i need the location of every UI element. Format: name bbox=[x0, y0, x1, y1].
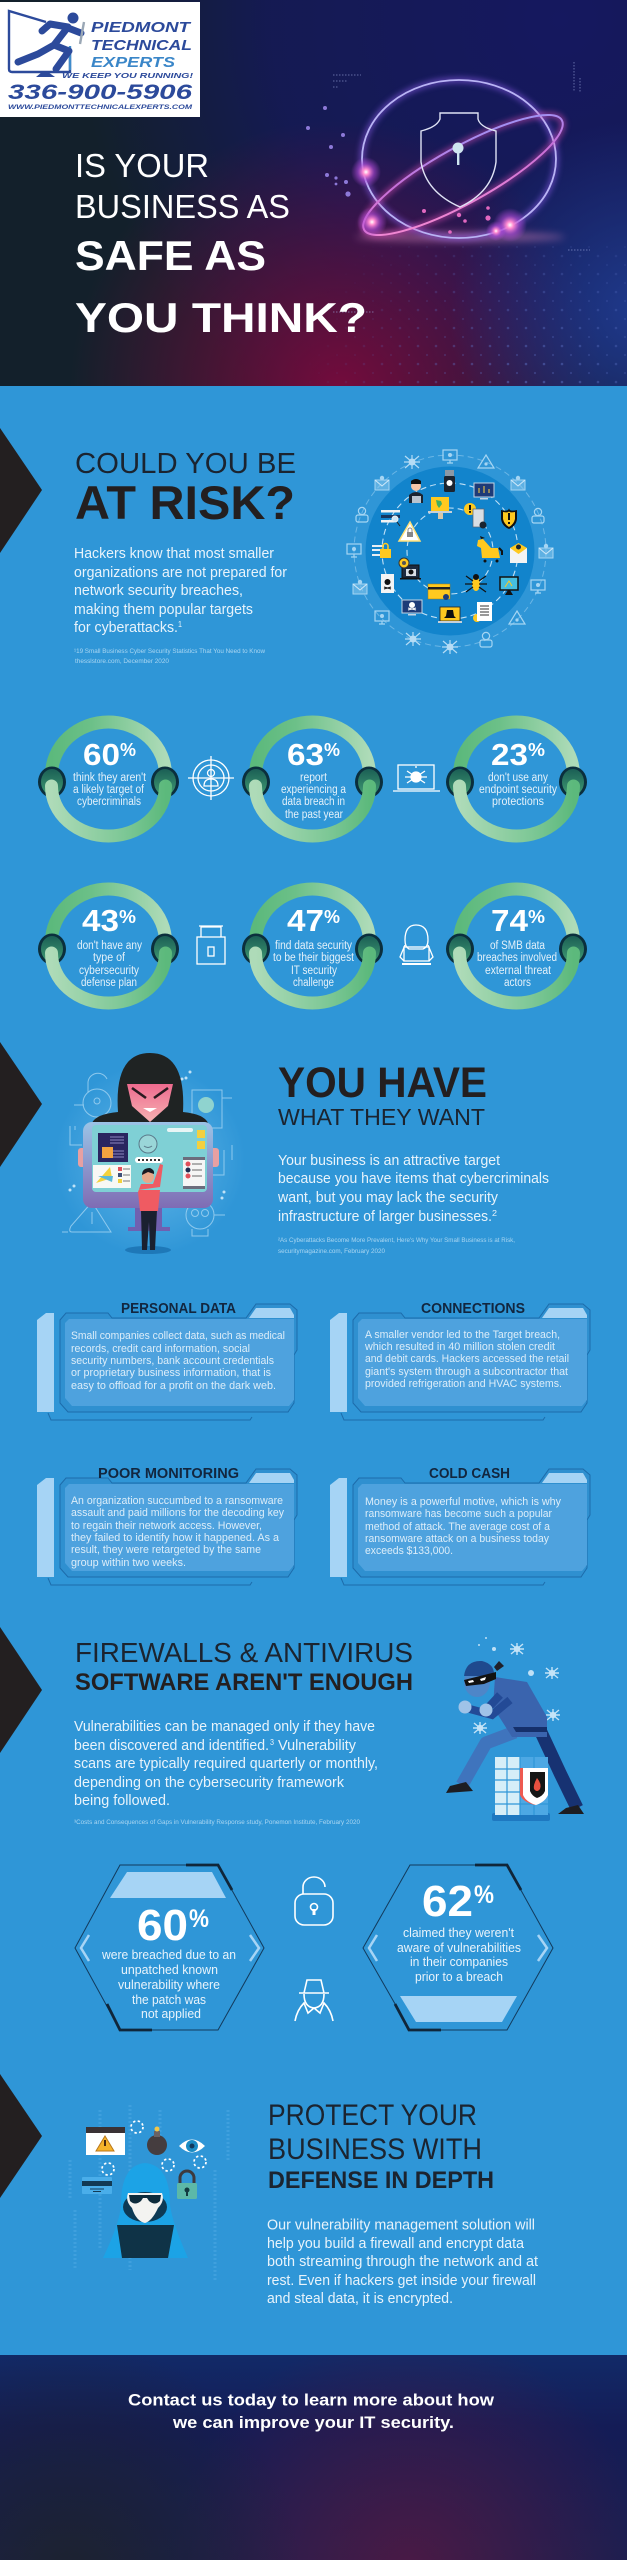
panel: poor monitoring: assault and paid millions for the decoding key bbox=[71, 1507, 284, 1519]
bomb laptop icon bbox=[399, 558, 421, 580]
documents icon bbox=[473, 602, 492, 622]
outer ring icons bbox=[347, 450, 553, 654]
firewall bbox=[492, 1757, 550, 1821]
panel: poor monitoring: An organization succumbed to a ransomware bbox=[71, 1495, 283, 1507]
heading: could you be at risk: COULD YOU BE bbox=[75, 448, 296, 480]
stat: 43 percent: % bbox=[119, 907, 136, 927]
logo bbox=[0, 2, 200, 117]
panel: personal data: or proprietary business information, that is bbox=[71, 1367, 271, 1379]
skull document icon bbox=[381, 574, 394, 593]
panel: cold cash bbox=[330, 1466, 590, 1585]
head bbox=[464, 1667, 490, 1697]
panel: connections: and debit cards. Hackers accessed the retail bbox=[365, 1353, 569, 1365]
panel: connections: provided refrigeration and HVAC systems. bbox=[365, 1378, 562, 1390]
arms bbox=[466, 1695, 510, 1715]
threat icon wheel bbox=[347, 450, 553, 654]
pale background line icons bbox=[62, 1073, 232, 1236]
stat: hexagon 62 percent bbox=[363, 1865, 553, 2030]
panel: cold cash: COLD CASH bbox=[429, 1466, 510, 1482]
stat: hexagon 62 percent: prior to a breach bbox=[415, 1970, 503, 1984]
stat: hexagon 62 percent: 62 bbox=[422, 1877, 473, 1926]
stat: hexagon 60 percent: % bbox=[189, 1905, 209, 1933]
stat: 63 percent: the past year bbox=[285, 809, 343, 821]
stat: hexagon 62 percent: aware of vulnerabilities bbox=[397, 1941, 521, 1955]
hands bbox=[78, 1148, 90, 1167]
stat: 60 percent bbox=[38, 722, 179, 836]
padlock bbox=[177, 2171, 197, 2199]
panel: connections: giant's system through a subcontractor that bbox=[365, 1366, 568, 1378]
stat: 63 percent bbox=[242, 722, 383, 836]
main title bbox=[75, 147, 367, 341]
text block: vulnerability management: and steal data, it is encrypted. bbox=[267, 2291, 453, 2307]
stat: 74 percent: % bbox=[528, 907, 545, 927]
stat: 23 percent bbox=[446, 722, 587, 836]
stat: 47 percent: challenge bbox=[293, 977, 334, 989]
panel: connections: CONNECTIONS bbox=[421, 1301, 525, 1317]
text block: attractive target bbox=[277, 1153, 549, 1225]
stat rings row one bbox=[38, 722, 587, 836]
panel: poor monitoring bbox=[37, 1466, 297, 1585]
footnote 2: securitymagazine.com, February 2020 bbox=[278, 1248, 385, 1255]
stat: 47 percent bbox=[242, 889, 383, 1003]
main title: IS YOUR bbox=[75, 147, 209, 184]
text block: hackers know: for cyberattacks. bbox=[74, 620, 178, 636]
stat: 63 percent: experiencing a bbox=[281, 784, 347, 796]
panel: cold cash: method of attack. The average cost of a bbox=[365, 1521, 551, 1533]
panel: poor monitoring: result, they were retargeted by the same bbox=[71, 1544, 261, 1556]
stat: hexagon 60 percent bbox=[75, 1865, 264, 2030]
call to action: we can improve your IT security. bbox=[172, 2413, 454, 2432]
shoes bbox=[446, 1782, 473, 1793]
icon: padlock bbox=[197, 926, 225, 964]
face bbox=[127, 1084, 173, 1122]
heading: could you be at risk: AT RISK? bbox=[75, 476, 295, 529]
front leg bbox=[462, 1732, 515, 1785]
footnote 2 bbox=[278, 1237, 515, 1255]
panel: personal data: easy to offload for a profit on the dark web. bbox=[71, 1380, 276, 1392]
stat: 47 percent: IT security bbox=[291, 965, 337, 977]
section arrow bbox=[0, 1627, 42, 1753]
stat: 43 percent: don't have any bbox=[77, 940, 142, 952]
text block: vulnerabilities: Vulnerabilities can be managed only if they have bbox=[74, 1719, 375, 1735]
stat: hexagon 60 percent: unpatched known bbox=[121, 1963, 218, 1977]
stat: hexagon 62 percent: in their companies bbox=[410, 1955, 508, 1969]
text block: vulnerabilities: been discovered and identified. bbox=[74, 1738, 269, 1754]
panel: personal data: PERSONAL DATA bbox=[121, 1301, 236, 1317]
text block: attractive target: 2 bbox=[492, 1209, 498, 1218]
face bbox=[123, 2192, 167, 2222]
panel: poor monitoring: to regain their network access. However, bbox=[71, 1520, 262, 1532]
stat: 60 percent: a likely target of bbox=[73, 784, 145, 796]
torso bbox=[493, 1677, 547, 1737]
illustration: hooded hacker with threats bbox=[70, 2105, 228, 2280]
warning browser bbox=[86, 2127, 125, 2155]
stat: hexagon 60 percent: were breached due to an bbox=[101, 1948, 236, 1962]
text block: vulnerabilities: Vulnerability bbox=[278, 1738, 357, 1754]
text block: vulnerability management: help you build a firewall and encrypt data bbox=[267, 2236, 525, 2252]
heading: protect your business: PROTECT YOUR bbox=[268, 2099, 477, 2132]
hat laptop icon bbox=[438, 607, 462, 623]
stat: 60 percent: think they aren't bbox=[73, 772, 147, 784]
stat: 74 percent: of SMB data bbox=[490, 940, 546, 952]
icon: glowing shield and orbit rings bbox=[306, 80, 575, 254]
text block: hackers know: organizations are not prepared for bbox=[74, 565, 287, 581]
hacker icon bbox=[409, 479, 423, 503]
logo: EXPERTS bbox=[91, 54, 175, 71]
sunglasses bbox=[129, 2195, 161, 2204]
stat: 74 percent: external threat bbox=[485, 965, 552, 977]
infected laptop icon bbox=[428, 497, 452, 519]
stat rings row two bbox=[38, 889, 587, 1003]
section arrow bbox=[0, 1042, 42, 1167]
stat: hexagon 62 percent: % bbox=[474, 1881, 494, 1909]
panel: cold cash: ransomware has become such a popular bbox=[365, 1508, 552, 1520]
stat: 74 percent: breaches involved bbox=[477, 952, 557, 964]
heading: protect your business: BUSINESS WITH bbox=[268, 2133, 482, 2166]
stat: 47 percent: % bbox=[324, 907, 340, 927]
stat: 43 percent: type of bbox=[93, 952, 126, 964]
stat: 63 percent: % bbox=[324, 740, 340, 760]
text block: vulnerabilities: being followed. bbox=[74, 1793, 170, 1809]
stat: 74 percent: actors bbox=[504, 977, 531, 989]
stat: hexagon 60 percent: vulnerability where bbox=[118, 1978, 220, 1992]
text block: hackers know: 1 bbox=[178, 620, 182, 629]
panel: connections bbox=[330, 1301, 590, 1420]
panel: personal data: records, credit card information, social bbox=[71, 1343, 250, 1355]
text block: hackers know: Hackers know that most smaller bbox=[74, 546, 274, 562]
text block: hackers know bbox=[74, 546, 287, 636]
firewall lock icon bbox=[372, 544, 391, 558]
stat: 63 percent: 63 bbox=[287, 737, 324, 772]
laptop bbox=[117, 2225, 174, 2258]
snowflake bugs bbox=[473, 1637, 560, 1734]
stat: 23 percent: endpoint security bbox=[479, 784, 557, 796]
icon: laptop with bug bbox=[393, 765, 440, 791]
stat: 23 percent: protections bbox=[492, 796, 544, 808]
footnote 3: ³Costs and Consequences of Gaps in Vulnerability Response study, Ponemon Institute, February 2020 bbox=[74, 1819, 360, 1826]
text block: vulnerability management: both streaming through the network and at bbox=[267, 2254, 538, 2270]
icon: spy bbox=[295, 1980, 333, 2021]
panel: connections: A smaller vendor led to the Target breach, bbox=[365, 1329, 560, 1341]
stat: 23 percent: 23 bbox=[491, 737, 528, 772]
stat: 43 percent: 43 bbox=[82, 903, 119, 938]
stat: 60 percent: 60 bbox=[83, 737, 120, 772]
panel: cold cash: ransomware attack on a business today bbox=[365, 1533, 549, 1545]
screen panels bbox=[93, 1128, 205, 1189]
heading: you have what they want: WHAT THEY WANT bbox=[278, 1104, 485, 1130]
heading: protect your business: DEFENSE IN DEPTH bbox=[268, 2167, 494, 2194]
alert phone bomb icon bbox=[464, 503, 486, 528]
icon: hooded hacker with laptop bbox=[400, 925, 433, 964]
text block: attractive target: Your business is an attractive target bbox=[278, 1153, 500, 1169]
stat: 60 percent: % bbox=[120, 740, 136, 760]
panel: personal data bbox=[37, 1301, 297, 1420]
monitor stand bbox=[128, 1205, 170, 1231]
monitor and runner mark bbox=[9, 11, 84, 77]
person at the screen bbox=[125, 1164, 171, 1254]
text block: vulnerability management: rest. Even if hackers get inside your firewall bbox=[267, 2273, 536, 2289]
warning triangle icon bbox=[399, 522, 420, 541]
stat: 23 percent: don't use any bbox=[488, 772, 548, 784]
text block: hackers know: network security breaches, bbox=[74, 583, 243, 599]
spider icon bbox=[465, 574, 487, 592]
warning shield icon bbox=[501, 508, 517, 529]
stat: hexagon 62 percent: claimed they weren't bbox=[403, 1926, 515, 1940]
stat: 43 percent: defense plan bbox=[81, 977, 137, 989]
main title: SAFE AS bbox=[75, 232, 266, 279]
footnote 2: ²As Cyberattacks Become More Prevalent, Here's Why Your Small Business is at Risk, bbox=[278, 1237, 515, 1244]
text block: hackers know: making them popular targets bbox=[74, 602, 253, 618]
section arrow bbox=[0, 428, 42, 553]
heading: you have what they want: YOU HAVE bbox=[278, 1059, 487, 1107]
text block: vulnerabilities: scans are typically required quarterly or monthly, bbox=[74, 1756, 378, 1772]
call to action bbox=[128, 2390, 495, 2432]
monitor bbox=[83, 1122, 213, 1208]
call to action: Contact us today to learn more about how bbox=[128, 2390, 495, 2410]
text block: vulnerability management bbox=[267, 2218, 538, 2307]
dotted rings bbox=[102, 2121, 206, 2175]
back leg bbox=[540, 1730, 577, 1808]
panel: personal data: security numbers, bank account credentials bbox=[71, 1355, 274, 1367]
logo: PIEDMONT bbox=[91, 19, 192, 36]
text block: attractive target: infrastructure of larger businesses. bbox=[278, 1209, 492, 1225]
heading: firewalls and antivirus: SOFTWARE AREN'T ENOUGH bbox=[75, 1669, 413, 1696]
trojan horse icon bbox=[477, 536, 502, 562]
heading: could you be at risk bbox=[75, 448, 296, 529]
stat: 43 percent bbox=[38, 889, 179, 1003]
illustration: thief and firewall bbox=[446, 1637, 584, 1821]
header banner bbox=[0, 0, 627, 386]
text block: attractive target: want, but you may lack the security bbox=[277, 1190, 499, 1206]
search browser icon bbox=[381, 510, 400, 526]
text block: vulnerabilities bbox=[74, 1719, 378, 1809]
hood bbox=[103, 2163, 188, 2258]
heading: protect your business bbox=[268, 2099, 494, 2194]
eye bbox=[179, 2140, 205, 2152]
envelope alert icon bbox=[510, 543, 527, 563]
main title: BUSINESS AS bbox=[75, 188, 290, 225]
heading: you have what they want bbox=[278, 1059, 487, 1130]
stat: 47 percent: to be their biggest bbox=[273, 952, 355, 964]
stat: 74 percent bbox=[446, 889, 587, 1003]
stat: 74 percent: 74 bbox=[491, 903, 529, 938]
heading: firewalls and antivirus: FIREWALLS & ANTIVIRUS bbox=[75, 1637, 413, 1668]
stat: hexagon 60 percent: 60 bbox=[137, 1901, 188, 1950]
chart monitor icon bbox=[474, 483, 494, 500]
hood bbox=[92, 1053, 208, 1123]
footer banner bbox=[0, 2355, 627, 2560]
logo: WWW.PIEDMONTTECHNICALEXPERTS.COM bbox=[8, 105, 193, 111]
panel: poor monitoring: group within two weeks. bbox=[71, 1557, 186, 1569]
stat: hexagon 60 percent: the patch was bbox=[132, 1993, 206, 2007]
credit card bbox=[82, 2177, 112, 2194]
panel: personal data: Small companies collect data, such as medical bbox=[71, 1330, 285, 1342]
icon: open padlock bbox=[295, 1877, 333, 1925]
main title: YOU THINK? bbox=[75, 294, 367, 341]
stat: 23 percent: % bbox=[528, 740, 545, 760]
text block: vulnerabilities: 3 bbox=[270, 1738, 274, 1747]
panel: poor monitoring: they failed to identify how it happened. As a bbox=[71, 1532, 280, 1544]
icon: target person bbox=[188, 756, 234, 800]
stat: 47 percent: 47 bbox=[287, 903, 324, 938]
logo: WE KEEP YOU RUNNING! bbox=[62, 73, 194, 80]
heading: firewalls and antivirus bbox=[75, 1637, 413, 1696]
stat: 43 percent: cybersecurity bbox=[79, 965, 139, 977]
logo: 336-900-5906 bbox=[8, 81, 192, 104]
stat: 63 percent: data breach in bbox=[282, 796, 345, 808]
credit card icon bbox=[428, 584, 450, 600]
broken monitor icon bbox=[500, 577, 518, 595]
bomb bbox=[147, 2126, 167, 2155]
logo: TECHNICAL bbox=[91, 37, 192, 54]
stat: 63 percent: report bbox=[300, 772, 328, 784]
section arrow bbox=[0, 2074, 42, 2198]
illustration: hacker behind monitor bbox=[55, 1053, 245, 1255]
text block: attractive target: because you have items that cybercriminals bbox=[278, 1171, 549, 1187]
stat: hexagon 60 percent: not applied bbox=[141, 2007, 201, 2021]
panel: cold cash: Money is a powerful motive, which is why bbox=[365, 1496, 561, 1508]
footnote 1: thesslstore.com, December 2020 bbox=[75, 658, 169, 665]
text block: vulnerability management: Our vulnerability management solution will bbox=[267, 2218, 535, 2234]
panel: cold cash: exceeds $133,000. bbox=[365, 1545, 453, 1557]
panel: poor monitoring: POOR MONITORING bbox=[98, 1466, 239, 1482]
skull monitor icon bbox=[402, 600, 422, 616]
text block: vulnerabilities: depending on the cybersecurity framework bbox=[74, 1775, 345, 1791]
panel: connections: which resulted in 40 million stolen credit bbox=[364, 1341, 555, 1353]
footnote 1: ¹19 Small Business Cyber Security Statistics That You Need to Know bbox=[74, 648, 265, 655]
footnote 1 bbox=[74, 648, 265, 665]
stat: 47 percent: find data security bbox=[275, 940, 352, 952]
usb skull icon bbox=[444, 470, 455, 492]
stat: 60 percent: cybercriminals bbox=[77, 796, 141, 808]
